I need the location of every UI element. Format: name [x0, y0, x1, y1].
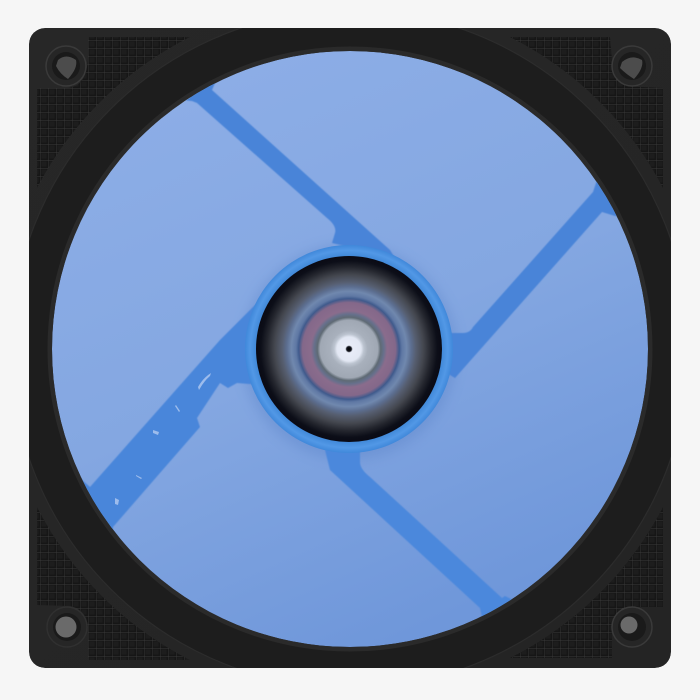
strut: bottom left [80, 298, 262, 535]
hub [245, 245, 453, 453]
impeller [52, 51, 648, 647]
blade rim highlight [161, 98, 190, 118]
hub shadow [241, 244, 457, 460]
textured corner: bottom right [510, 507, 663, 658]
rotor motion rings [256, 256, 442, 442]
screw hole: bottom right [612, 607, 652, 647]
hub ring [245, 245, 453, 453]
strut: top right [450, 181, 617, 378]
strut marks [115, 373, 211, 505]
strut: top left [186, 83, 394, 255]
textured corner: bottom left [37, 507, 190, 660]
textured corner: top left [37, 37, 190, 188]
screw hole: bottom left [47, 607, 87, 647]
strut: bottom right [324, 450, 512, 616]
ring inner ledge [50, 49, 650, 649]
textured corner: top right [510, 37, 663, 188]
blades disc [52, 51, 648, 647]
screw hole: top left [46, 46, 86, 86]
screw hole: top right [612, 46, 652, 86]
